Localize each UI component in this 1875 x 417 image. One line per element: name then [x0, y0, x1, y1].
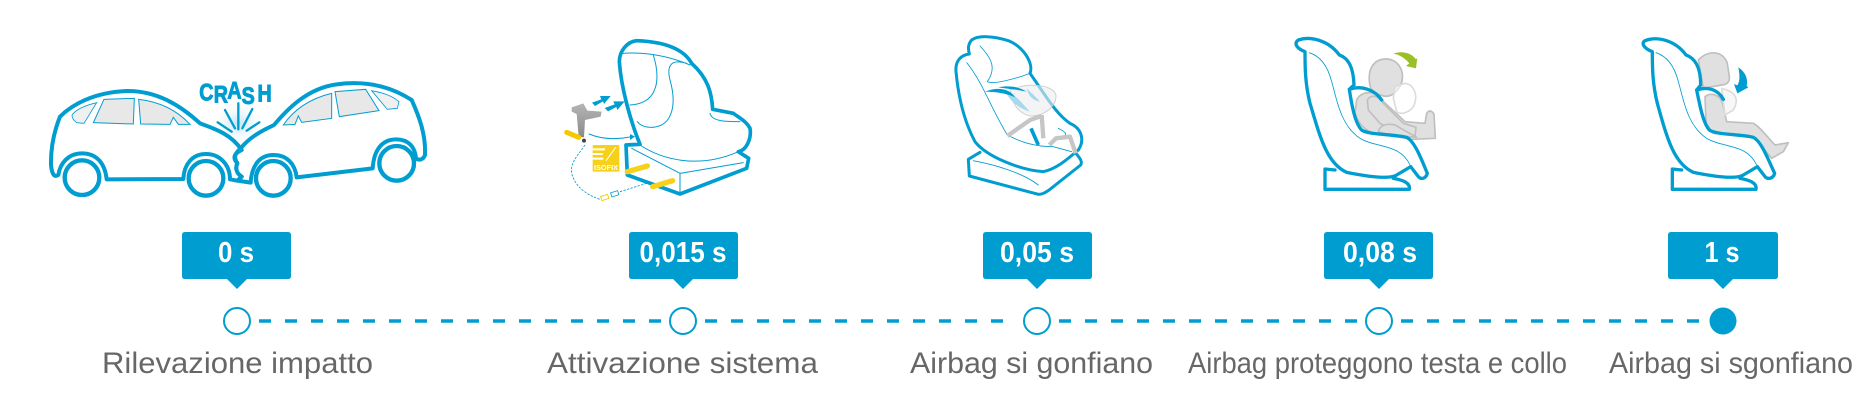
- node: [670, 308, 696, 334]
- step 1: 0 s: [102, 232, 373, 380]
- child: [1698, 53, 1788, 158]
- label: Rilevazione impatto: [102, 347, 373, 380]
- step 3: 0,05 s: [910, 232, 1153, 380]
- step 4: 0,08 s: [1188, 232, 1567, 380]
- node: [224, 308, 250, 334]
- time tag: [1668, 232, 1778, 289]
- seat: [1643, 39, 1775, 189]
- node: [1024, 308, 1050, 334]
- isofix badge: [593, 145, 619, 172]
- step 5: 1 s: [1609, 232, 1853, 380]
- harness: [1007, 115, 1076, 153]
- time tag: [629, 232, 738, 289]
- time tag: 0,05 s: [1000, 237, 1074, 269]
- time tag: [1324, 232, 1433, 289]
- wiring: [571, 145, 647, 201]
- left car: [51, 91, 242, 196]
- label: Airbag si gonfiano: [910, 347, 1153, 380]
- child: [1355, 59, 1435, 139]
- step 2: 0,015 s: [547, 232, 818, 380]
- right car: [235, 83, 425, 196]
- sensor: [567, 103, 602, 143]
- illustration: airbags deflate: [1643, 39, 1788, 189]
- timeline dashed line: [259, 319, 1700, 323]
- airbag: [985, 85, 1056, 116]
- arrows: [589, 96, 635, 140]
- isofix badge: ISOFIX: [594, 163, 618, 172]
- time tag: 1 s: [1704, 237, 1740, 269]
- seat shell: [956, 37, 1082, 172]
- time tag: [983, 232, 1092, 289]
- crash word: CRASH: [199, 77, 272, 109]
- thin lines: [967, 46, 1072, 185]
- time tag: 0 s: [218, 237, 254, 269]
- impact burst: [218, 103, 259, 132]
- node: [1710, 308, 1736, 334]
- node: [1366, 308, 1392, 334]
- illustration: airbags inflating: [956, 37, 1082, 194]
- illustration: car crash: [51, 77, 425, 196]
- time tag: 0,015 s: [640, 237, 726, 269]
- illustration: airbags protect head and neck: [1296, 39, 1435, 189]
- time tag: [182, 232, 291, 289]
- seat base: [968, 152, 1081, 194]
- time tag: 0,08 s: [1343, 237, 1417, 269]
- seat: [619, 41, 750, 194]
- label: Airbag proteggono testa e collo: [1188, 347, 1567, 380]
- label: Attivazione sistema: [547, 347, 818, 380]
- connectors: [627, 166, 673, 187]
- label: Airbag si sgonfiano: [1609, 347, 1853, 380]
- illustration: ISOFIX seat activation: [567, 41, 750, 201]
- arrow: blue: [1734, 67, 1748, 93]
- arrow: green: [1393, 52, 1417, 68]
- seat: [1296, 39, 1427, 189]
